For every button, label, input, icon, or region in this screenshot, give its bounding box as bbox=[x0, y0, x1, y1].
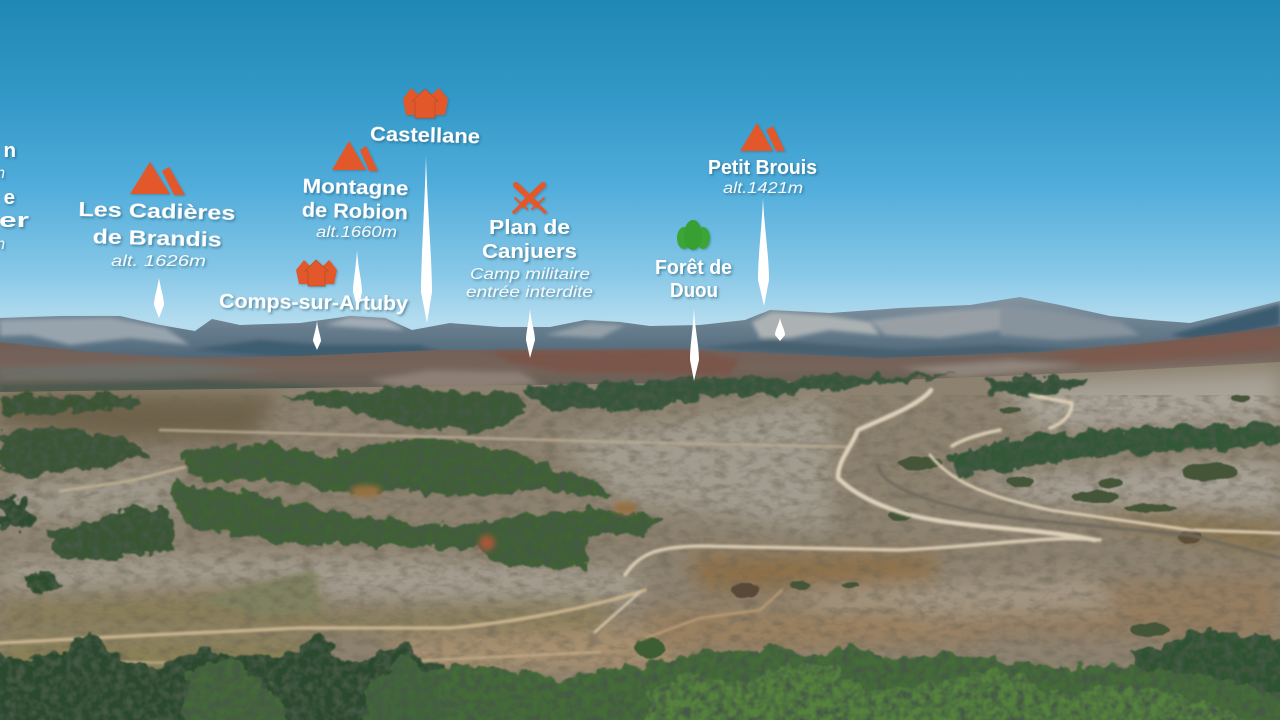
name: Canjuers bbox=[482, 240, 577, 263]
altitude: alt. 1626m bbox=[111, 253, 206, 270]
icon: crossed swords bbox=[514, 185, 545, 212]
pin: Petit Brouis bbox=[758, 198, 769, 306]
sky bbox=[0, 0, 1280, 340]
icon: houses bbox=[403, 88, 448, 118]
name: Les Cadières bbox=[78, 198, 236, 225]
name: de Brandis bbox=[92, 225, 222, 252]
pin: Les Cadières de Brandis bbox=[154, 278, 164, 318]
name: Petit Brouis bbox=[708, 156, 817, 179]
name: Comps-sur-Artuby bbox=[219, 290, 409, 315]
icon: mountains bbox=[130, 162, 185, 195]
altitude: alt.1421m bbox=[723, 180, 803, 197]
name bbox=[482, 216, 577, 263]
foreground trees bbox=[0, 630, 1280, 720]
icon: houses bbox=[296, 260, 337, 286]
dirt roads bbox=[0, 390, 1280, 665]
icon: trees bbox=[677, 220, 710, 250]
name: Montagne bbox=[302, 175, 409, 200]
altitude: alt.1660m bbox=[316, 224, 397, 241]
label: Montagne de Robion bbox=[302, 141, 409, 241]
name: Forêt de bbox=[655, 256, 732, 279]
partly cropped label at left edge: e bbox=[4, 186, 15, 209]
icon: mountains bbox=[332, 141, 378, 171]
pin: Comps-sur-Artuby bbox=[313, 321, 321, 350]
icon: mountains bbox=[740, 123, 785, 151]
label: Petit Brouis bbox=[708, 123, 817, 197]
rock and scrub texture bbox=[0, 395, 1280, 720]
name: Duou bbox=[670, 279, 718, 302]
name: de Robion bbox=[302, 199, 408, 224]
name bbox=[302, 175, 409, 224]
note bbox=[466, 266, 593, 301]
distant tree line bbox=[0, 376, 1090, 432]
label: Plan de Canjuers bbox=[466, 185, 593, 301]
pin: Forêt de Duou bbox=[690, 308, 699, 381]
pin: Montagne de Robion bbox=[353, 250, 362, 310]
partly cropped label at left edge: n bbox=[3, 139, 16, 162]
foreground terrain bbox=[0, 362, 1280, 720]
pin: Castellane bbox=[421, 155, 432, 323]
pin: small Petit Brouis marker bbox=[775, 318, 785, 341]
autumn shrubs bbox=[350, 485, 637, 551]
name bbox=[77, 198, 236, 252]
pine woods bbox=[0, 422, 1280, 595]
distant mountains bbox=[0, 297, 1280, 365]
name bbox=[655, 256, 732, 302]
label: Les Cadières de Brandis bbox=[77, 162, 236, 270]
reddish mid-distance plain bbox=[0, 326, 1280, 395]
note: entrée interdite bbox=[466, 284, 593, 301]
label: Comps-sur-Artuby bbox=[219, 260, 409, 315]
name: Castellane bbox=[370, 123, 480, 148]
scattered scrub bbox=[635, 394, 1250, 659]
label: Forêt de Duou bbox=[655, 220, 732, 302]
name: Plan de bbox=[489, 216, 570, 239]
pin: Plan de Canjuers bbox=[526, 309, 535, 358]
note: Camp militaire bbox=[470, 266, 590, 283]
partly cropped label at left edge bbox=[0, 139, 29, 253]
label: Castellane bbox=[370, 88, 480, 148]
